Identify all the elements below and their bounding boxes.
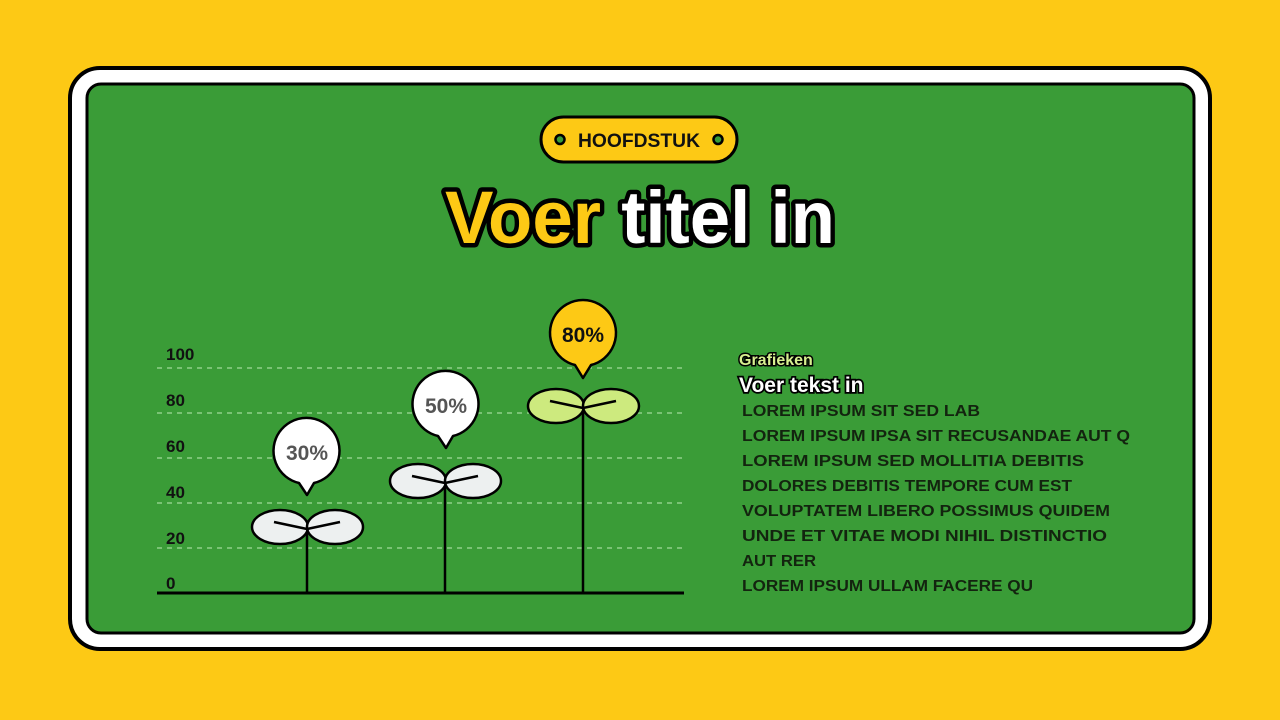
subheading: Grafieken <box>739 352 813 369</box>
body lines: LOREM IPSUM SIT SED LAB <box>742 403 980 420</box>
y axis labels <box>166 345 194 593</box>
chart <box>157 300 684 593</box>
plant 30%: 30% <box>286 442 328 465</box>
badge: hoofdstuk <box>541 117 737 162</box>
text block <box>739 352 1130 595</box>
heading: Voer tekst in <box>739 374 863 397</box>
body lines: DOLORES DEBITIS TEMPORE CUM EST <box>742 478 1072 495</box>
outer frame <box>70 68 1210 649</box>
title: Voer titel in <box>445 176 835 259</box>
body lines: AUT RER <box>742 553 816 570</box>
body lines: UNDE ET VITAE MODI NIHIL DISTINCTIO <box>742 528 1107 545</box>
plant 80%: 80% <box>562 324 604 347</box>
y axis labels: 0 <box>166 574 175 593</box>
y axis labels: 100 <box>166 345 194 364</box>
plant 80% <box>528 300 639 593</box>
y axis labels: 60 <box>166 437 185 456</box>
y axis labels: 20 <box>166 529 185 548</box>
body lines: VOLUPTATEM LIBERO POSSIMUS QUIDEM <box>742 503 1110 520</box>
y axis labels: 40 <box>166 483 185 502</box>
body lines: LOREM IPSUM IPSA SIT RECUSANDAE AUT Q <box>742 428 1130 445</box>
body lines: LOREM IPSUM SED MOLLITIA DEBITIS <box>742 453 1084 470</box>
y axis labels: 80 <box>166 391 185 410</box>
badge: hoofdstuk: HOOFDSTUK <box>578 131 700 152</box>
plant 30% <box>252 418 363 593</box>
green panel <box>87 84 1194 633</box>
plant 50% <box>390 371 501 593</box>
body lines <box>742 403 1130 595</box>
body lines: LOREM IPSUM ULLAM FACERE QU <box>742 578 1033 595</box>
plant 50%: 50% <box>425 395 467 418</box>
